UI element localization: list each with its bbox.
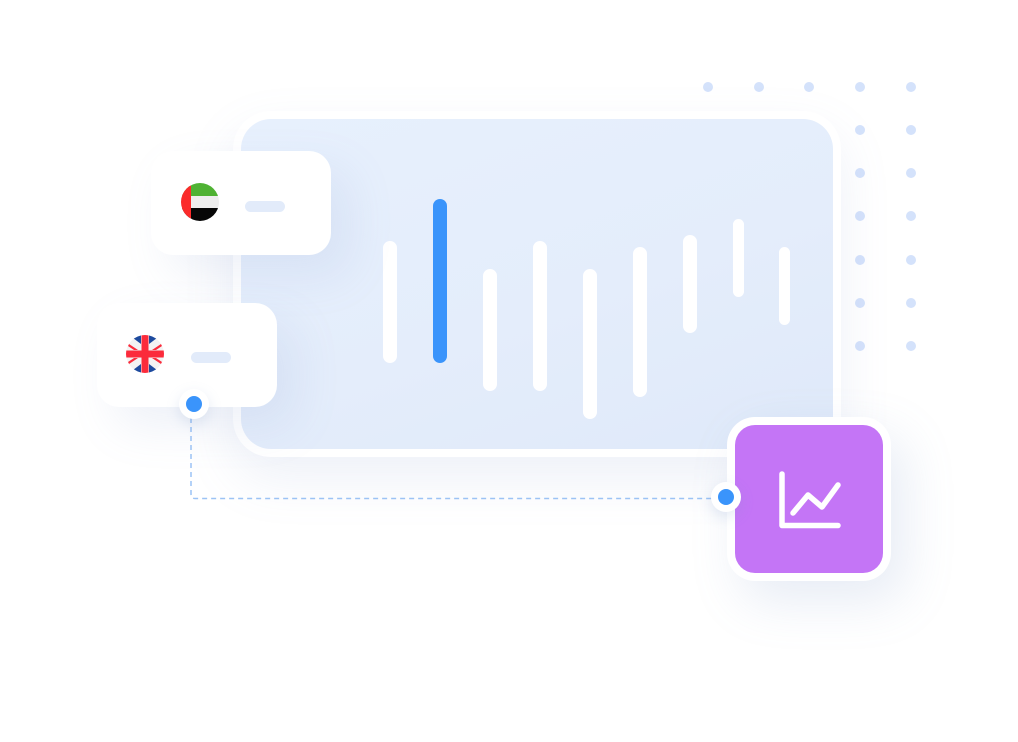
label placeholder pill xyxy=(245,201,285,212)
card: UAE xyxy=(151,151,331,255)
dot grid xyxy=(703,82,916,351)
bar chart xyxy=(383,199,790,419)
tile: purple chart xyxy=(727,417,891,581)
tile fill xyxy=(735,425,883,573)
icon: UK flag xyxy=(126,335,164,373)
label placeholder pill xyxy=(191,352,231,363)
dashed connector xyxy=(190,418,712,500)
panel: main chart xyxy=(233,111,841,457)
connector node: right xyxy=(711,482,741,512)
icon: UAE flag xyxy=(181,183,219,221)
icon: line chart xyxy=(779,471,841,528)
card: UK xyxy=(97,303,277,407)
connector node: left xyxy=(179,389,209,419)
panel inner background xyxy=(241,119,833,449)
